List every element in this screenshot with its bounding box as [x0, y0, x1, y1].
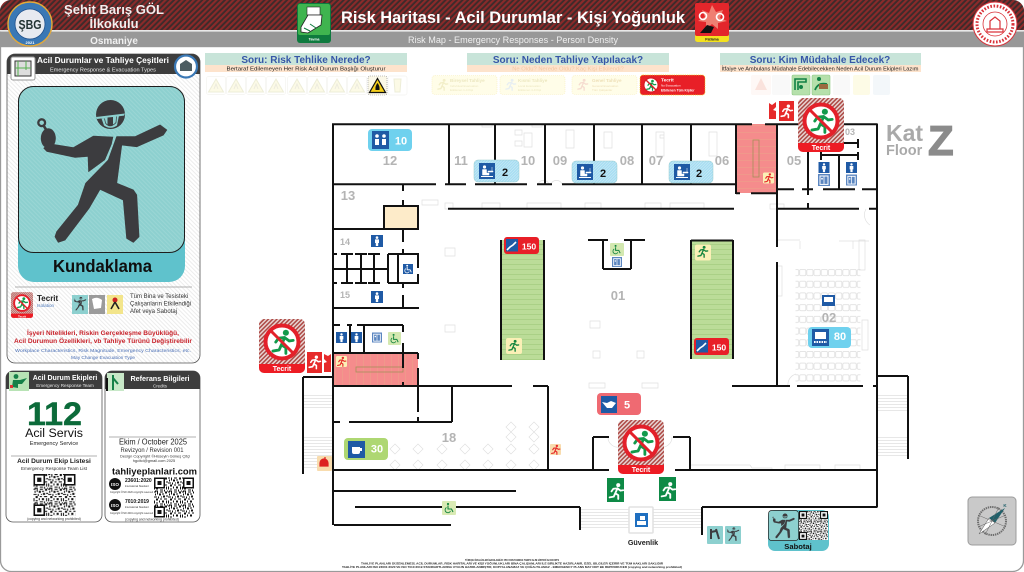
- school name: [64, 2, 164, 47]
- icons: upper restrooms: [818, 162, 857, 186]
- badge: meeting 5: [597, 393, 641, 415]
- card: individual: [432, 76, 497, 94]
- iso badge 7010: Copyright ©ISO 2019 copyright reserved: [110, 512, 154, 515]
- badge: cafeteria 30: [344, 438, 388, 460]
- sign: green exit right: [659, 477, 676, 501]
- compass: [968, 497, 1016, 545]
- logo: school seal: [8, 2, 52, 46]
- iso badge 7010: International Standard: [125, 506, 149, 509]
- service label: Acil Servis: [25, 426, 83, 440]
- sabotage card: Sabotaj: [784, 542, 812, 551]
- furniture and faint details: [304, 124, 907, 529]
- card: isolation: Etkilenen Tüm Kişiler: [661, 88, 695, 92]
- sign: tecrit entrance: Tecrit: [632, 467, 651, 474]
- badge: hall 80: [808, 327, 851, 348]
- icon: floor plan: [11, 57, 35, 80]
- badge: stairs 150 left: [504, 237, 539, 254]
- badge: office room 10: 2: [502, 167, 508, 179]
- blue note: [15, 348, 191, 361]
- date: Ekim / October 2025: [119, 438, 188, 446]
- icon: active fire hazard: [368, 76, 387, 95]
- security post: [629, 507, 653, 533]
- icon: mini earthquake: [89, 295, 105, 314]
- isolation label: Tecrit: [37, 294, 59, 303]
- panel heading: Referans Bilgileri: [130, 374, 190, 383]
- question 1 heading: Soru: Risk Tehlike Nerede?: [241, 55, 371, 66]
- icon: hall screen: [822, 295, 835, 306]
- evacuation type cards: [432, 75, 705, 95]
- designer credit: [120, 454, 190, 463]
- icon: fire runner cafeteria: [550, 444, 561, 455]
- icon: arsonist figure: [38, 100, 167, 242]
- icon: reference: [107, 373, 124, 391]
- panel: emergency teams: [6, 371, 102, 522]
- sign: tecrit north: [798, 98, 844, 152]
- room numbers: 18: [442, 430, 456, 445]
- badge: stairs 150 right: 150: [712, 342, 726, 352]
- footer legal text: TÜRKÇE ÖZELLİKLERİ BAKILABİLİR: PDU DOSYASINDA TAMPO ALIM HİSTORİ ACCOUNTS: [465, 558, 559, 562]
- isolation label: [37, 294, 59, 308]
- card: arson: [18, 86, 185, 282]
- footer legal text: TAHLİYE PLANLARI ISO 23601:2020 VE ISO 7010:2019 STANDARTLARINA UYGUN HAZIRLANMIŞTIR, KOPYALANAMAZ VE ÇOĞALTILAMAZ - EMERGENCY PLANS MAY NOT BE REPRODUCED (copying and networking prohibited): [342, 564, 682, 569]
- icon: explosion risk: [695, 3, 729, 42]
- isolation description: [130, 294, 191, 315]
- icon: mini arson: [72, 295, 88, 314]
- card: isolation: [640, 75, 705, 95]
- storage box: [384, 206, 418, 229]
- phone number: 112: [27, 396, 82, 432]
- panel header: [6, 371, 102, 389]
- footer legal text: TAHLİYE PLANLARI DÜZENLEMESİ, ACİL DURUMLAR, RİSK HARİTALARI VE KİŞİ YOĞUNLUKLARI BİNA ÇALIŞANLARI İLE BİRLİKTE HAZIRLANIR, ÖZEL BİLGİLER İÇERİR VE TÜM HAKLARI SAKLIDIR: [361, 560, 664, 566]
- question 2 heading: Soru: Neden Tahliye Yapılacak?: [493, 55, 643, 66]
- icon: accessible toilet: [403, 264, 413, 274]
- card label: Kundaklama: [53, 256, 152, 276]
- badge: room 12 occupancy: 10: [395, 136, 407, 148]
- card: partial: [500, 76, 565, 94]
- red hazard zones: [334, 124, 777, 385]
- floor label: Floor: [886, 143, 923, 159]
- designer credit: hgcitci@gmail.com 2025: [133, 458, 175, 463]
- icon: green stair runner left: [506, 338, 522, 354]
- copyright note: (copying and networking prohibited): [125, 518, 179, 522]
- card: general: Genel Tahliye: [592, 78, 622, 83]
- panel header: [105, 371, 200, 389]
- icon: stair runner north: [763, 172, 774, 184]
- card: partial: Etkilenen 4-9 Kişi: [518, 88, 542, 92]
- sign: tecrit north: Tecrit: [812, 145, 831, 152]
- room numbers: [340, 127, 855, 445]
- badge: hall 80: 80: [834, 331, 846, 343]
- logo: school seal: 2021: [26, 40, 35, 45]
- card: general: Tüm Çalışanlar: [592, 88, 612, 92]
- badge: stairs 150 left: 150: [522, 242, 536, 252]
- iso badge 23601: International Standard: [125, 485, 149, 488]
- card: isolation: Tecrit: [661, 78, 674, 84]
- mini team icons: [707, 526, 741, 544]
- icon: explosion risk: Patlama: [705, 38, 719, 42]
- room numbers: 05: [787, 153, 801, 168]
- sabotage card: [768, 510, 829, 551]
- room numbers: 09: [553, 153, 567, 168]
- room numbers: 07: [649, 153, 663, 168]
- question 2 heading: [467, 53, 669, 72]
- room numbers: 10: [521, 153, 535, 168]
- footer legal text: [342, 558, 682, 569]
- question 3 heading: Soru: Kim Müdahale Edecek?: [750, 55, 890, 66]
- sign: tecrit entrance: [618, 420, 664, 474]
- floor plan: [259, 98, 908, 547]
- panel subheading: Emergency Response Team: [36, 383, 94, 388]
- icon: injury risk: [297, 3, 331, 43]
- icon: injury risk: Tavma: [309, 38, 319, 42]
- badge: office room 08: [572, 161, 617, 183]
- panel subheading: Emergency Response & Evacuation Types: [50, 68, 156, 74]
- school name: Şehit Barış GÖL: [64, 2, 164, 17]
- room numbers: 12: [383, 153, 397, 168]
- blue note: Workplace Characteristics, Risk Magnitude, Emergency Characteristics, etc.: [15, 348, 191, 354]
- iso badge 23601: ISO: [111, 482, 119, 487]
- room numbers: 13: [341, 188, 355, 203]
- logo: school seal: ŞBG: [18, 17, 42, 32]
- iso badge 23601: 23601:2020: [125, 478, 152, 484]
- response team icons: [751, 75, 890, 95]
- logo: small seal: [175, 56, 197, 78]
- header band: [0, 0, 1024, 47]
- service label english: Emergency Service: [30, 441, 78, 447]
- question 1 heading: [205, 53, 407, 72]
- iso badge 7010: ISO: [111, 503, 119, 508]
- isolation description: Afet veya Sabotaj: [130, 309, 177, 315]
- sign: fire exit north: [769, 101, 794, 121]
- floor label: Kat: [886, 120, 923, 146]
- icon: isolation sign: Tecrit: [18, 314, 26, 318]
- card: partial: Local Evacuation: [518, 84, 541, 88]
- room numbers: 11: [454, 153, 468, 168]
- badge: room 12 occupancy: [368, 129, 412, 151]
- designer credit: Design Copyright ©Hüseyin Güneş Çitçi: [120, 454, 190, 458]
- icon: medical team active: [812, 75, 830, 95]
- red note: İşyeri Nitelikleri, Riskin Gerçekleşme Büyüklüğü,: [27, 329, 179, 337]
- badge: office room 10: [474, 160, 519, 182]
- qr code: [34, 474, 76, 516]
- blue note: May Change Evacuation Type: [71, 355, 135, 361]
- qr code: [154, 478, 194, 518]
- room numbers: 06: [715, 153, 729, 168]
- sign: green exit left: [607, 478, 624, 502]
- icon: accessible exit: [442, 501, 456, 515]
- question 1 heading: Bertaraf Edilemeyen Her Risk Acil Durum Başlığı Oluşturur: [226, 66, 386, 72]
- card: partial: Kısmi Tahliye: [518, 78, 548, 83]
- card: individual: Etkilenen 1-4 Kişi: [450, 88, 474, 92]
- subtitle: Risk Map - Emergency Responses - Person Density: [408, 35, 618, 46]
- title: Risk Haritası - Acil Durumlar - Kişi Yoğunluk: [341, 8, 686, 27]
- question 2 heading: Ne Oldu? Nerede Oldu? Kaç Kişi Etkilendi?: [512, 66, 625, 72]
- panel: credits: [105, 371, 200, 522]
- iso badge 23601: Copyright ©ISO 2020 copyright reserved: [110, 491, 154, 494]
- icons: lower restrooms: [336, 332, 401, 345]
- icon: green stair runner right: [695, 244, 711, 260]
- revision: Revizyon / Revision 001: [120, 448, 184, 454]
- icon: mini fire: [107, 295, 123, 314]
- team list subheading: Emergency Response Team List: [21, 466, 88, 471]
- room numbers: 03: [845, 127, 855, 137]
- compass: K: [1003, 503, 1007, 508]
- security label: Güvenlik: [628, 538, 658, 547]
- icon: first responder active: [792, 75, 810, 95]
- green staircases: [501, 240, 733, 360]
- team list heading: Acil Durum Ekip Listesi: [17, 458, 91, 465]
- red note: [14, 329, 192, 345]
- isolation label: Isolation: [37, 303, 55, 308]
- panel heading: Acil Durumlar ve Tahliye Çeşitleri: [37, 56, 169, 65]
- card: individual: Bireysel Tahliye: [450, 78, 485, 83]
- icon: extinguisher: [317, 456, 332, 471]
- iso badge 7010: [109, 499, 154, 515]
- panel heading: Acil Durum Ekipleri: [33, 375, 97, 382]
- badge: office room 06: [669, 161, 713, 183]
- iso badge 7010: 7010:2019: [125, 499, 149, 505]
- sign: tecrit west: Tecrit: [273, 366, 292, 373]
- card: individual: Individual Evacuation: [450, 84, 479, 88]
- room numbers: 08: [620, 153, 634, 168]
- isolation description: Çalışanların Etkilendiği: [130, 302, 191, 308]
- walls: [303, 124, 908, 535]
- icon: isolation sign: [11, 292, 33, 318]
- question 3 heading: [720, 53, 921, 72]
- sign: tecrit west: [259, 319, 305, 373]
- badge: stairs 150 right: [694, 338, 729, 355]
- iso badge 23601: [109, 478, 154, 494]
- room numbers: 02: [822, 310, 836, 325]
- school name: Osmaniye: [90, 36, 138, 47]
- isolation description: Tüm Bina ve Tesisteki: [130, 294, 188, 300]
- copyright note: (copying and networking prohibited): [27, 517, 81, 521]
- card: general: General Evacuation: [592, 84, 619, 88]
- badge: office room 08: 2: [600, 168, 606, 180]
- badge: cafeteria 30: 30: [371, 444, 383, 456]
- icon: team: [9, 372, 29, 391]
- icon: stair runner west: [336, 356, 347, 367]
- red note: Acil Durumun Özellikleri, vb Tahliye Türünü Değiştirebilir: [14, 336, 192, 345]
- icon: toilet 14: [371, 235, 383, 247]
- question 3 heading: İtfaiye ve Ambulans Müdahale Edebilecekken Neden Acil Durum Ekipleri Lazım: [722, 66, 919, 72]
- school name: İlkokulu: [90, 16, 138, 31]
- panel: emergency types: [7, 54, 200, 363]
- website: tahliyeplanlari.com: [112, 466, 197, 476]
- badge: office room 06: 2: [696, 168, 702, 180]
- sign: fire exit west: [307, 352, 331, 373]
- panel subheading: Credits: [153, 384, 168, 388]
- icon: toilet 15: [371, 291, 383, 303]
- panel header: [7, 54, 200, 74]
- question 1 hazard icons: [206, 76, 407, 95]
- floor label: [886, 117, 954, 164]
- card: general: [572, 76, 637, 94]
- icons: central lift: [610, 243, 624, 267]
- floor label: Z: [928, 117, 954, 164]
- room numbers: 14: [340, 237, 350, 247]
- logo: ministry seal: [973, 2, 1017, 46]
- badge: meeting 5: 5: [624, 400, 630, 412]
- card: isolation: No Evacuation: [661, 84, 681, 88]
- room numbers: 15: [340, 290, 350, 300]
- room numbers: 01: [611, 288, 625, 303]
